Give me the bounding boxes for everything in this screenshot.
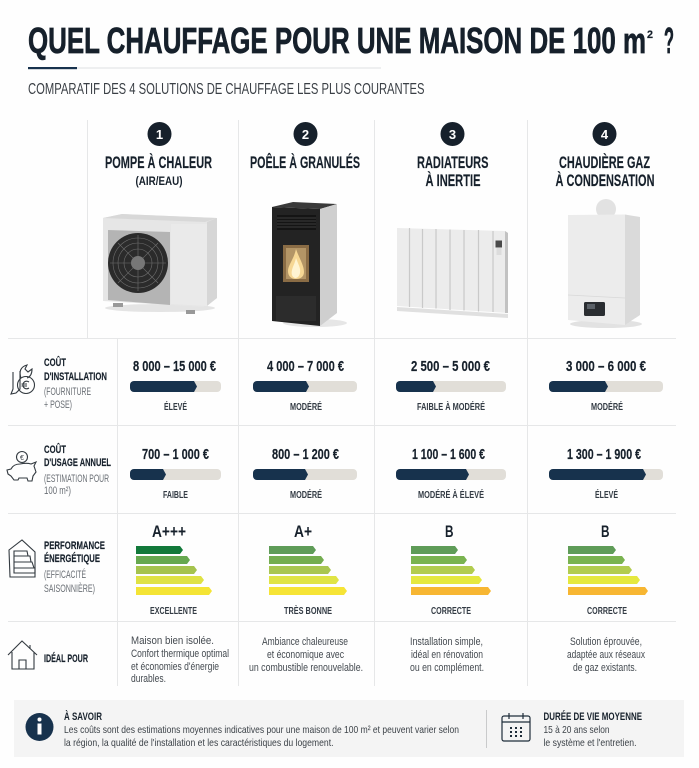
cell: energy class B chaudière: B <box>601 522 610 541</box>
durée de vie text: le système et l'entretien. <box>544 737 636 749</box>
cell: idéal chaudière: de gaz existants. <box>573 662 637 674</box>
heading: pompe à chaleur: (AIR/EAU) <box>136 174 183 188</box>
panel: column 4 header <box>556 122 654 328</box>
cell: pompe à chaleur usage: 700 – 1 000 € <box>142 446 209 463</box>
cell: poêle usage: MODÉRÉ <box>290 488 322 501</box>
cell: radiateurs install: FAIBLE À MODÉRÉ <box>417 400 485 413</box>
cell: energy class A+++ <box>136 522 212 617</box>
row: performance énergétique <box>9 522 648 617</box>
title: 2 <box>647 29 653 41</box>
cell: radiateurs usage <box>396 446 506 501</box>
cell: chaudière usage: ÉLEVÉ <box>595 488 618 501</box>
row label <box>44 356 107 411</box>
row label: (ESTIMATION POUR <box>44 473 109 485</box>
number badge 4 <box>592 122 616 146</box>
cell: idéal chaudière: adaptée aux réseaux <box>567 649 645 661</box>
cell: idéal poêle: un combustible renouvelable. <box>249 662 363 674</box>
heading: chaudière gaz: CHAUDIÈRE GAZ <box>559 153 650 172</box>
heading: pompe à chaleur <box>105 153 212 188</box>
cell: pompe à chaleur install: ÉLEVÉ <box>164 400 187 413</box>
row: idéal pour <box>8 635 645 685</box>
title underline <box>28 67 381 69</box>
row label: SAISONNIÈRE) <box>44 582 95 595</box>
row label: COÛT <box>44 356 66 369</box>
cell: idéal pompe à chaleur: durables. <box>131 673 166 685</box>
cell: radiateurs usage: MODÉRÉ À ÉLEVÉ <box>418 488 484 501</box>
cell: energy class B chaudière: CORRECTE <box>587 605 627 617</box>
icon: piggy bank <box>7 452 36 481</box>
row label: 100 m²) <box>44 485 71 497</box>
durée de vie text: 15 à 20 ans selon <box>544 724 610 736</box>
cell: idéal poêle: et économique avec <box>267 649 344 661</box>
durée de vie text <box>544 710 642 749</box>
row label: (EFFICACITÉ <box>44 568 86 581</box>
cell: energy class B radiateurs <box>411 522 491 617</box>
cell: energy class B radiateurs: CORRECTE <box>431 605 471 617</box>
icon: calendar <box>502 713 530 741</box>
cell: idéal pompe à chaleur: Maison bien isolée. <box>131 635 214 647</box>
cell: poêle usage <box>253 446 357 501</box>
cell: energy class A+++: A+++ <box>152 522 186 541</box>
number badge 4: 4 <box>601 127 609 142</box>
cell: idéal chaudière <box>567 636 645 674</box>
cell: chaudière usage: 1 300 – 1 900 € <box>567 446 641 463</box>
cell: idéal pompe à chaleur: Confort thermique optimal <box>131 648 229 660</box>
cell: pompe à chaleur usage: FAIBLE <box>163 489 188 501</box>
row label: D'USAGE ANNUEL <box>44 457 111 469</box>
cell: idéal radiateurs: ou en complément. <box>410 662 484 674</box>
panel: column 3 header <box>397 122 508 318</box>
subtitle: COMPARATIF DES 4 SOLUTIONS DE CHAUFFAGE LES PLUS COURANTES <box>28 81 424 98</box>
heading: radiateurs à inertie: RADIATEURS <box>417 154 488 172</box>
cell: pompe à chaleur install <box>130 358 221 413</box>
cell: chaudière install: 3 000 – 6 000 € <box>566 358 647 375</box>
row label <box>44 540 105 595</box>
row: coût d'usage annuel <box>7 443 663 501</box>
illustration: pellet stove <box>272 202 347 327</box>
cell: idéal pompe à chaleur: et économies d'énergie <box>131 661 219 673</box>
number badge 3: 3 <box>449 127 456 142</box>
illustration: inertia radiator <box>397 228 508 318</box>
cell: idéal radiateurs <box>410 636 484 674</box>
row label: COÛT <box>44 443 66 456</box>
cell: energy class A+++: EXCELLENTE <box>150 605 197 617</box>
cell: radiateurs install: 2 500 – 5 000 € <box>411 358 490 375</box>
panel: column 2 header <box>250 122 360 327</box>
icon: info <box>26 713 54 741</box>
cell: pompe à chaleur install: 8 000 – 15 000 € <box>133 358 216 375</box>
cell: idéal chaudière: Solution éprouvée, <box>570 636 642 648</box>
cell: poêle install: MODÉRÉ <box>290 400 322 413</box>
à savoir text: la région, la qualité de l'installation et les caractéristiques du logement. <box>64 737 334 749</box>
number badge 2 <box>294 122 318 146</box>
cell: energy class A+: A+ <box>294 522 312 541</box>
cell: idéal radiateurs: idéal en rénovation <box>411 649 483 661</box>
text: ? <box>664 20 674 61</box>
number badge 2: 2 <box>302 127 309 142</box>
panel: column 1 header <box>103 122 217 314</box>
à savoir text: Les coûts sont des estimations moyennes indicatives pour une maison de 100 m² et peuvent varier selon <box>64 724 459 736</box>
cell: energy class A+ <box>269 522 347 617</box>
cell: idéal pompe à chaleur <box>131 635 229 685</box>
cell: idéal poêle: Ambiance chaleureuse <box>262 636 348 648</box>
cell: radiateurs install <box>396 358 506 413</box>
heading: radiateurs à inertie: À INERTIE <box>426 171 480 190</box>
number badge 1: 1 <box>156 127 163 142</box>
row label: D'INSTALLATION <box>44 371 107 383</box>
number badge 3 <box>440 122 464 146</box>
heading: pompe à chaleur: POMPE À CHALEUR <box>105 153 212 172</box>
cell: chaudière usage <box>549 446 663 501</box>
cell: energy class B radiateurs: B <box>445 522 454 541</box>
cell: chaudière install <box>549 358 663 413</box>
heading: chaudière gaz <box>556 153 654 190</box>
illustration: heat pump <box>103 214 217 314</box>
heading: poêle à granulés: POÊLE À GRANULÉS <box>250 153 360 172</box>
icon: piggy bank: € <box>20 455 24 462</box>
row: coût d'installation <box>11 356 663 413</box>
number badge 1 <box>148 122 172 146</box>
cell: chaudière install: MODÉRÉ <box>591 400 623 413</box>
icon: house with energy bars <box>9 540 35 577</box>
row label: PERFORMANCE <box>44 540 105 552</box>
durée de vie text: DURÉE DE VIE MOYENNE <box>544 710 642 723</box>
cell: radiateurs usage: 1 100 – 1 600 € <box>412 446 485 463</box>
icon: wrench and euro <box>11 365 34 394</box>
row label <box>44 443 111 497</box>
cell: pompe à chaleur usage <box>130 446 221 501</box>
heading: radiateurs à inertie <box>417 154 488 190</box>
panel: footer note <box>14 700 684 757</box>
à savoir text <box>64 710 459 749</box>
cell: poêle install: 4 000 – 7 000 € <box>267 358 344 375</box>
cell: poêle usage: 800 – 1 200 € <box>272 446 339 463</box>
illustration: gas boiler <box>568 199 642 328</box>
cell: poêle install <box>253 358 357 413</box>
cell: energy class A+: TRÈS BONNE <box>284 604 332 617</box>
cell: idéal radiateurs: Installation simple, <box>410 636 483 648</box>
row label: (FOURNITURE <box>44 386 91 398</box>
à savoir text: À SAVOIR <box>64 710 102 723</box>
cell: energy class B chaudière <box>568 522 648 617</box>
table grid <box>8 120 676 686</box>
row label: ÉNERGÉTIQUE <box>44 552 100 565</box>
icon: house <box>8 641 37 669</box>
cell: idéal poêle <box>249 636 363 674</box>
row label: + POSE) <box>44 399 72 411</box>
row label: IDÉAL POUR <box>44 652 88 665</box>
